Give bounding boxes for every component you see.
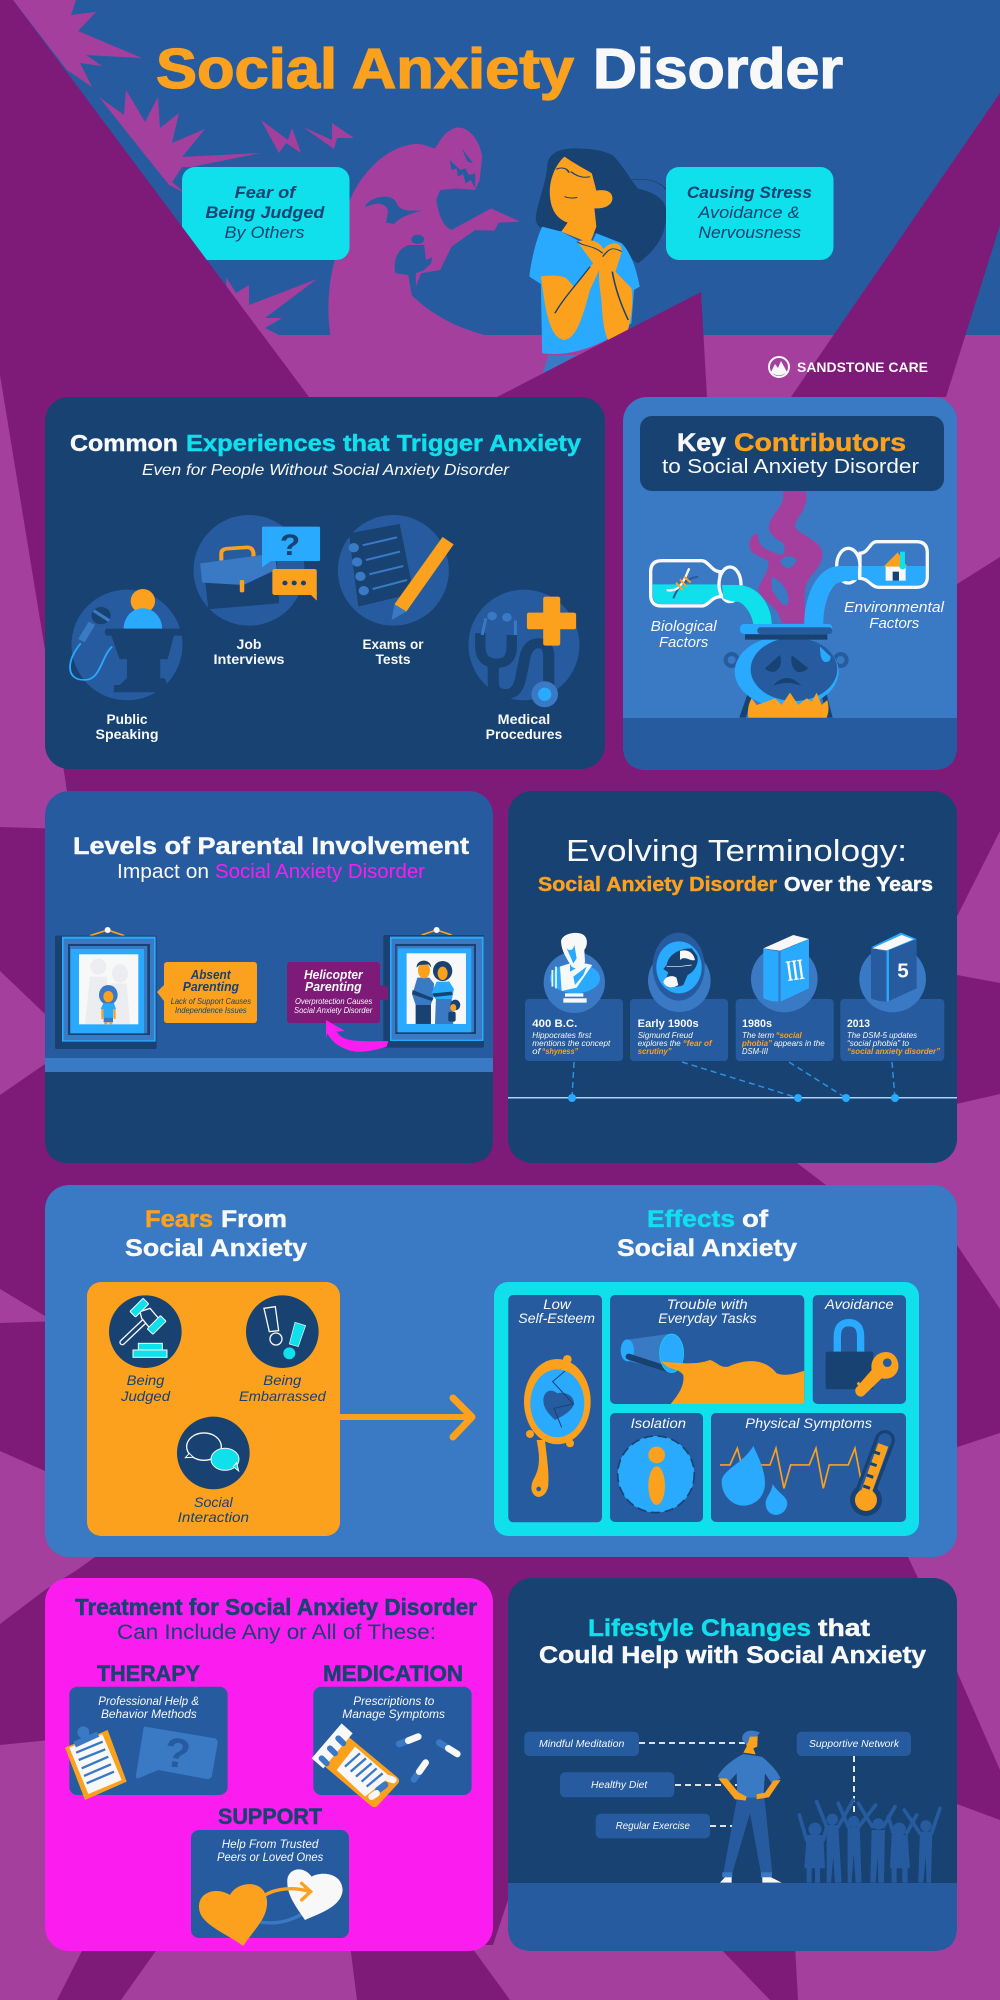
callout: helicopter parenting: Social Anxiety Disorder [294, 1006, 373, 1015]
timeline card: early 1900s: “fear of [683, 1038, 713, 1048]
heading: treatment: Treatment for Social Anxiety Disorder [75, 1594, 477, 1620]
heading: parental involvement: Levels of Parental Involvement [73, 833, 469, 860]
timeline card: early 1900s [630, 999, 728, 1061]
label: biological factors [651, 618, 717, 651]
icon: DSM-III book: III [784, 953, 806, 988]
illustration: anxious woman [529, 148, 667, 375]
card: support [191, 1804, 349, 1946]
timeline card: 1980s: phobia” [741, 1038, 773, 1048]
panel: evolving terminology [508, 791, 957, 1163]
label: medical procedures: Medical [498, 712, 550, 727]
callout: absent parenting [157, 962, 257, 1023]
label: public speaking [96, 712, 158, 742]
label: environmental factors: Factors [869, 615, 920, 632]
heading: effects: Effects [647, 1206, 735, 1233]
timeline card: 400 B.C.: mentions the concept [532, 1038, 611, 1048]
connector lines [639, 1743, 854, 1826]
tag: healthy diet: Healthy Diet [591, 1779, 648, 1791]
tile: trouble with everyday tasks: Everyday Tasks [658, 1310, 757, 1326]
icon: Freud portrait [648, 933, 711, 1012]
panel: treatment [45, 1578, 493, 1951]
icon: exam paper and pencil [338, 515, 454, 626]
callout: helicopter parenting: Helicopter [304, 968, 364, 982]
heading: lifestyle changes [539, 1615, 927, 1669]
tag: mindful meditation [524, 1732, 639, 1756]
label: social interaction [178, 1494, 249, 1525]
heading: effects [617, 1206, 798, 1262]
panel: common experiences [45, 397, 605, 769]
title [156, 37, 843, 101]
tile: low self-esteem [508, 1295, 602, 1522]
heading: evolving terminology [538, 833, 933, 896]
picture: family with overbearing parents [383, 927, 484, 1048]
arrow: magenta curve [326, 1020, 388, 1052]
timeline card: early 1900s: scrutiny” [638, 1046, 672, 1056]
tile: isolation: Isolation [631, 1415, 686, 1431]
tag: healthy diet [560, 1772, 674, 1797]
tile: low self-esteem: Self-Esteem [518, 1310, 595, 1326]
card: support: Help From Trusted [222, 1837, 319, 1851]
heading: evolving terminology: Social Anxiety Disorder [538, 874, 777, 896]
icon: Hippocrates bust [544, 933, 605, 1013]
label: environmental factors: Environmental [844, 599, 945, 616]
heading: parental involvement: Impact on [117, 861, 209, 883]
callout: causing stress [666, 167, 834, 260]
card: support: Peers or Loved Ones [217, 1850, 323, 1864]
icon: DSM-5 book [859, 933, 926, 1012]
icon: exclamation marks [246, 1295, 319, 1368]
timeline card: 2013 [840, 999, 944, 1061]
callout: absent parenting: Parenting [183, 980, 239, 994]
title: Disorder [593, 37, 843, 101]
callout: fear of being judged: Fear of [235, 183, 298, 202]
heading: effects: Social Anxiety [617, 1235, 798, 1262]
illustration: standing man [718, 1731, 782, 1883]
heading: common experiences [70, 430, 581, 456]
label: being embarrassed: Being [263, 1372, 302, 1388]
label: public speaking: Speaking [96, 727, 158, 742]
panel: fears and effects [45, 1185, 957, 1557]
label: biological factors: Factors [659, 634, 709, 651]
timeline card: early 1900s: explores the [638, 1038, 681, 1048]
icon: gavel [109, 1295, 182, 1368]
arrow: fears lead to effects [340, 1398, 472, 1437]
label: being embarrassed [239, 1372, 327, 1404]
timeline axis with dated dots [508, 1062, 957, 1102]
icon: DSM-III book [751, 935, 818, 1012]
heading: effects: of [742, 1206, 769, 1233]
card: medication: MEDICATION [323, 1661, 463, 1686]
heading: key contributors: to Social Anxiety Disorder [662, 456, 919, 478]
heading: fears: Social Anxiety [125, 1235, 308, 1262]
callout: helicopter parenting [287, 962, 388, 1023]
fears box [87, 1282, 340, 1536]
timeline card: 1980s [736, 999, 834, 1061]
callout: helicopter parenting: Overprotection Causes [295, 997, 372, 1006]
card: medication: Manage Symptoms [342, 1707, 445, 1721]
panel: lifestyle changes [508, 1578, 957, 1951]
icon: pill bottle and capsules [312, 1723, 457, 1807]
icon: medical stethoscope and cross [468, 590, 579, 707]
label: job interviews: Interviews [214, 652, 284, 667]
tile: avoidance: Avoidance [824, 1296, 894, 1312]
icon: clipboard and question bubble: ? [162, 1728, 193, 1778]
label: exams or tests [362, 637, 424, 667]
callout: fear of being judged: By Others [224, 223, 305, 242]
timeline card: 1980s: DSM-III [742, 1046, 769, 1056]
effects box [494, 1282, 919, 1536]
logo: Sandstone Care [769, 357, 928, 377]
label: being judged: Judged [120, 1388, 171, 1404]
heading: fears: From [221, 1206, 287, 1233]
callout: causing stress: Nervousness [698, 223, 802, 242]
tile: physical symptoms [711, 1413, 906, 1522]
card: support: SUPPORT [218, 1804, 323, 1829]
heading: key contributors [640, 416, 944, 491]
label: medical procedures [486, 712, 562, 742]
label: biological factors: Biological [651, 618, 717, 635]
tile: trouble with everyday tasks: Trouble with [667, 1296, 748, 1312]
heading: parental involvement: Social Anxiety Disorder [215, 861, 425, 883]
heading: key contributors: Key [677, 429, 726, 457]
tile: physical symptoms: Physical Symptoms [745, 1415, 872, 1431]
tag: regular exercise [596, 1814, 710, 1838]
heading: lifestyle changes: Lifestyle Changes [588, 1615, 811, 1642]
icon: job interview briefcase [194, 515, 320, 626]
callout: absent parenting: Independence Issues [175, 1006, 247, 1015]
callout: absent parenting: Lack of Support Causes [171, 997, 251, 1006]
picture: child alone with faded parents [55, 927, 157, 1049]
tag: supportive network: Supportive Network [809, 1738, 900, 1750]
heading: key contributors: Contributors [734, 429, 906, 457]
panel: parental involvement [45, 791, 493, 1163]
callout: fear of being judged [182, 167, 350, 260]
label: social interaction: Interaction [178, 1509, 249, 1525]
card: therapy: Behavior Methods [101, 1707, 197, 1721]
callout: causing stress: Avoidance & [697, 203, 800, 222]
card: therapy [65, 1661, 228, 1800]
heading: treatment [75, 1594, 477, 1644]
heading: parental involvement [73, 833, 469, 883]
icon: DSM-5 book: 5 [897, 960, 909, 983]
timeline card: 400 B.C.: of [532, 1046, 542, 1056]
timeline card: 2013: 2013 [847, 1018, 870, 1030]
illustration: cheering crowd [799, 1800, 940, 1883]
heading: evolving terminology: Evolving Terminology: [566, 833, 907, 868]
label: public speaking: Public [106, 712, 148, 727]
panel: key contributors [623, 397, 957, 770]
label: exams or tests: Tests [376, 652, 410, 667]
icon: public speaking podium [70, 589, 182, 700]
label: medical procedures: Procedures [486, 727, 562, 742]
tile: low self-esteem: Low [543, 1296, 572, 1312]
tag: mindful meditation: Mindful Meditation [539, 1738, 624, 1750]
tile: isolation [610, 1413, 703, 1522]
heading: lifestyle changes: Could Help with Social Anxiety [539, 1642, 927, 1669]
logo: Sandstone Care: SANDSTONE CARE [797, 359, 928, 375]
timeline card: 1980s: 1980s [742, 1018, 772, 1030]
callout: absent parenting: Absent [190, 968, 231, 982]
heading: lifestyle changes: that [818, 1615, 870, 1642]
icon: hearts exchanging support [199, 1869, 343, 1946]
callout: causing stress: Causing Stress [687, 183, 812, 202]
callout: fear of being judged: Being Judged [205, 203, 325, 222]
card: medication: Prescriptions to [353, 1694, 435, 1708]
card: therapy: Professional Help & [98, 1694, 199, 1708]
tag: supportive network [797, 1732, 911, 1756]
card: therapy: THERAPY [97, 1661, 200, 1686]
label: exams or tests: Exams or [362, 637, 424, 652]
tag: regular exercise: Regular Exercise [616, 1820, 690, 1832]
heading: evolving terminology: Over the Years [784, 874, 933, 896]
tile: trouble with everyday tasks [610, 1295, 804, 1404]
callout: helicopter parenting: Parenting [305, 980, 362, 994]
heading: common experiences: Experiences that Trigger Anxiety [186, 430, 581, 456]
timeline card: 1980s: The term [742, 1030, 774, 1040]
icon: job interview briefcase: ? [280, 528, 300, 562]
label: being judged: Being [127, 1372, 165, 1388]
title: Social Anxiety [156, 37, 574, 101]
timeline card: 2013: “social phobia” to [847, 1038, 909, 1048]
timeline card: 400 B.C.: “shyness” [542, 1046, 579, 1056]
label: social interaction: Social [194, 1494, 234, 1510]
label: being judged [120, 1372, 171, 1404]
timeline card: 1980s: appears in the [774, 1038, 825, 1048]
heading: treatment: Can Include Any or All of These: [117, 1621, 436, 1644]
timeline card: 400 B.C. [525, 999, 623, 1061]
subheading: Even for People Without Social Anxiety Disorder [142, 462, 510, 479]
heading: fears: Fears [145, 1206, 213, 1233]
shadow monster looming behind the woman [328, 128, 520, 335]
label: being embarrassed: Embarrassed [239, 1388, 327, 1404]
timeline card: 2013: “social anxiety disorder” [847, 1046, 941, 1056]
label: job interviews [214, 637, 284, 667]
timeline card: early 1900s: Sigmund Freud [638, 1030, 693, 1040]
timeline card: 400 B.C.: 400 B.C. [532, 1018, 577, 1030]
card: medication [312, 1661, 472, 1807]
heading: fears [125, 1206, 308, 1262]
timeline card: early 1900s: Early 1900s [638, 1018, 699, 1030]
icon: clipboard and question bubble [65, 1726, 218, 1800]
label: environmental factors [844, 599, 945, 632]
heading: common experiences: Common [70, 430, 178, 456]
timeline card: 1980s: “social [776, 1030, 802, 1040]
tile: avoidance [813, 1295, 906, 1404]
label: job interviews: Job [236, 637, 262, 652]
icon: chat bubbles [177, 1417, 250, 1489]
timeline card: 2013: The DSM-5 updates [847, 1030, 918, 1040]
illustration: boiling pot with bottles [651, 491, 927, 718]
timeline card: 400 B.C.: Hippocrates first [532, 1030, 592, 1040]
